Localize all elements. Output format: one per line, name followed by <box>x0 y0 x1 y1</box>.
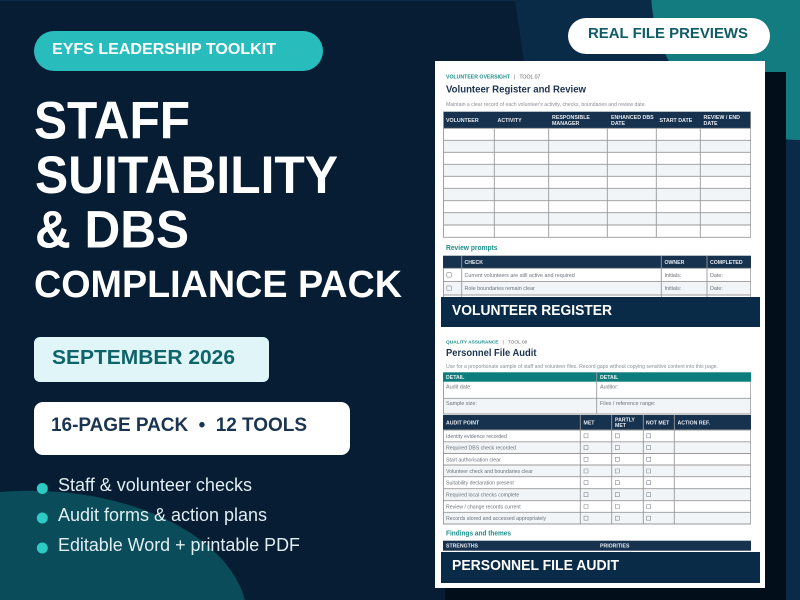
sheet title: Volunteer Register and Review <box>446 84 587 96</box>
label bar: volunteer register: VOLUNTEER REGISTER <box>452 303 612 319</box>
kicker: QUALITY ASSURANCE | TOOL 08 <box>446 339 528 345</box>
date badge <box>34 337 269 382</box>
detail table: Files / reference range: <box>600 401 655 407</box>
review prompts heading: Review prompts <box>446 245 498 252</box>
document shadow <box>445 72 786 600</box>
review prompts table: Initials: <box>664 286 681 292</box>
review prompts table: Role boundaries remain clear <box>464 286 535 292</box>
detail table <box>443 372 751 414</box>
kicker: VOLUNTEER OVERSIGHT | TOOL 07 <box>446 74 541 80</box>
bullet: staff checks: Staff & volunteer checks <box>58 475 252 495</box>
label bar: personnel file audit: PERSONNEL FILE AUDIT <box>452 558 619 574</box>
register table: MANAGER <box>552 121 580 127</box>
review prompts table: COMPLETED <box>710 260 743 266</box>
title <box>34 92 403 306</box>
audit table: ACTION REF. <box>678 420 711 426</box>
audit table <box>443 415 751 524</box>
label bar: volunteer register <box>441 297 760 327</box>
document preview sheet <box>435 61 765 588</box>
register table: START DATE <box>660 118 693 124</box>
review prompts table: Date: <box>710 286 723 292</box>
findings table header: PRIORITIES <box>600 544 630 550</box>
register table: REVIEW / END <box>704 115 740 121</box>
badge: real file previews <box>568 18 770 54</box>
preview: volunteer register <box>443 74 751 298</box>
review prompts table <box>443 256 751 298</box>
background shape: navy top right <box>515 0 800 600</box>
pack size badge <box>34 402 350 455</box>
detail table: DETAIL <box>600 375 619 381</box>
audit table: Review / change records current <box>446 504 521 510</box>
audit table: Records stored and accessed appropriately <box>446 516 546 522</box>
title: SUITABILITY <box>35 146 338 205</box>
badge: EYFS Leadership Toolkit <box>34 31 323 71</box>
preview: personnel file audit <box>443 339 751 551</box>
sheet title: Personnel File Audit <box>446 348 537 359</box>
register table: ACTIVITY <box>498 118 522 124</box>
title: STAFF <box>34 92 190 150</box>
register table: DATE <box>704 121 718 127</box>
bullet: audit forms: Audit forms & action plans <box>58 505 267 525</box>
findings table header <box>443 541 751 551</box>
review prompts table: Date: <box>710 273 723 279</box>
sheet intro: Use for a proportionate sample of staff and volunteer files. Record gaps without copying sensitive content into this page. <box>446 364 718 370</box>
detail table: DETAIL <box>446 375 465 381</box>
audit table: AUDIT POINT <box>446 420 480 426</box>
badge: real file previews: REAL FILE PREVIEWS <box>588 25 748 42</box>
findings heading: Findings and themes <box>446 530 511 538</box>
review prompts table: CHECK <box>464 260 483 266</box>
register table: DATE <box>611 121 625 127</box>
audit table: Required DBS check recorded <box>446 446 516 452</box>
audit table: MET <box>615 423 627 429</box>
audit table: MET <box>584 420 595 426</box>
register table: VOLUNTEER <box>446 118 479 124</box>
findings table header: STRENGTHS <box>446 544 479 550</box>
register table <box>443 112 751 237</box>
audit table: NOT MET <box>646 420 670 426</box>
bullet: editable word: Editable Word + printable PDF <box>58 535 300 555</box>
review prompts table: Initials: <box>664 273 681 279</box>
register table: RESPONSIBLE <box>552 115 590 121</box>
pack size badge: 16-PAGE PACK • 12 TOOLS <box>51 415 307 436</box>
detail table: Auditor: <box>600 384 619 390</box>
background shape: teal circle top right <box>651 0 800 140</box>
audit table: Suitability declaration present <box>446 481 514 487</box>
audit table: PARTLY <box>615 418 635 424</box>
title: & DBS <box>35 200 189 260</box>
title: COMPLIANCE PACK <box>34 264 403 306</box>
feature bullet list <box>37 475 300 555</box>
review prompts table: Current volunteers are still active and required <box>464 273 575 279</box>
label bar: personnel file audit <box>441 552 760 583</box>
detail table: Sample size: <box>446 401 477 407</box>
audit table: Start authorisation clear <box>446 457 501 463</box>
audit table: Identity evidence recorded <box>446 434 507 440</box>
detail table: Audit date: <box>446 384 472 390</box>
sheet intro: Maintain a clear record of each volunteer's activity, checks, boundaries and review date. <box>446 102 646 108</box>
date badge: SEPTEMBER 2026 <box>52 347 235 369</box>
register table: ENHANCED DBS <box>611 115 654 121</box>
audit table: Required local checks complete <box>446 493 519 499</box>
background shape: teal ellipse bottom left <box>0 491 245 600</box>
audit table: Volunteer check and boundaries clear <box>446 469 533 475</box>
review prompts table: OWNER <box>664 260 685 266</box>
badge: EYFS Leadership Toolkit: EYFS LEADERSHIP TOOLKIT <box>52 41 276 58</box>
